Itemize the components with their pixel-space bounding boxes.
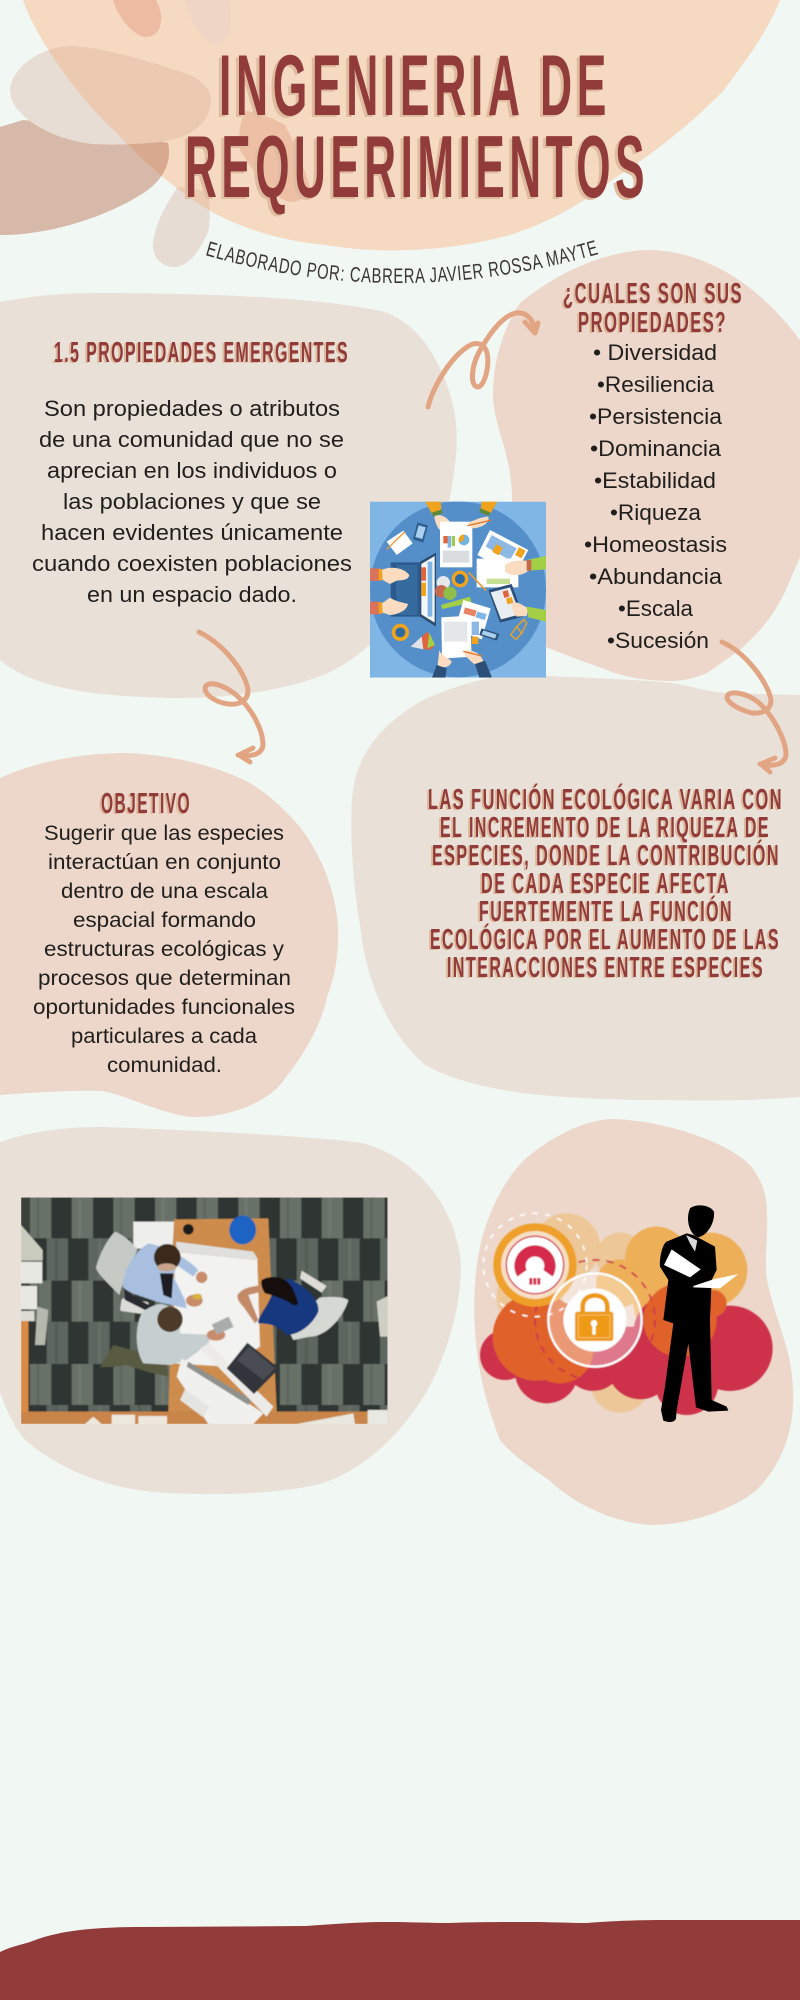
light clouds	[497, 1213, 649, 1413]
text block: objetivo: estructuras ecológicas y	[44, 938, 285, 961]
dark orange clouds	[493, 1283, 727, 1383]
list of properties: • Diversidad	[593, 340, 717, 365]
heading: objetivo: OBJETIVO	[101, 788, 191, 820]
text block: objetivo: dentro de una escala	[61, 880, 268, 903]
text block: definicion	[32, 396, 352, 607]
text block: objetivo	[33, 822, 295, 1077]
text block: objetivo: Sugerir que las especies	[44, 822, 284, 845]
papers on table	[133, 1222, 174, 1250]
panel: funcion ecologica	[351, 676, 800, 1100]
dashed circle red	[535, 1260, 655, 1380]
panel: propiedades list	[493, 250, 800, 681]
bottom docs	[455, 600, 491, 639]
panel: security illustration backdrop	[474, 1119, 793, 1525]
dashed circle white	[483, 1213, 587, 1317]
silhouette: businessman	[660, 1205, 738, 1422]
center pie, coffee and ruler	[437, 576, 450, 589]
list of properties: •Estabilidad	[594, 468, 716, 493]
image: team meeting photo	[21, 1197, 388, 1424]
list of properties	[584, 340, 727, 653]
panel: photo backdrop	[0, 1127, 461, 1494]
bottom arms	[438, 650, 452, 667]
title	[185, 38, 649, 216]
list of properties: •Dominancia	[590, 436, 722, 461]
list of properties: •Riqueza	[610, 500, 702, 525]
cups, palette, glasses	[392, 624, 409, 641]
text block: definicion: en un espacio dado.	[87, 582, 297, 607]
phone and notepad	[413, 522, 428, 543]
heading: cuales son sus propiedades	[563, 278, 743, 339]
left arms	[370, 568, 379, 581]
footer band	[0, 1920, 800, 2000]
text block: definicion: cuando coexisten poblaciones	[32, 551, 352, 576]
text block: definicion: aprecian en los individuos o	[47, 458, 337, 483]
text block: objetivo: procesos que determinan	[38, 967, 291, 990]
gauge	[493, 1223, 577, 1307]
hard hat	[229, 1216, 256, 1244]
table	[168, 1218, 277, 1412]
list of properties: •Escala	[618, 596, 694, 621]
tablet	[488, 584, 523, 623]
top arms	[425, 502, 442, 515]
text block: definicion: hacen evidentes únicamente	[41, 520, 343, 545]
man in blue shirt	[123, 1243, 198, 1308]
image: security clouds illustration	[480, 1205, 773, 1422]
left side furniture	[21, 1225, 43, 1261]
laptop	[391, 562, 420, 617]
text block: funcion ecologica	[428, 782, 783, 984]
list of properties: •Resiliencia	[597, 372, 715, 397]
lock ring	[548, 1273, 642, 1367]
list of properties: •Abundancia	[589, 564, 723, 589]
text block: objetivo: comunidad.	[107, 1054, 222, 1077]
arrow: to properties	[428, 313, 538, 407]
decorative header blobs	[0, 0, 780, 267]
top right documents	[477, 530, 528, 561]
list of properties: •Persistencia	[589, 404, 723, 429]
arrow: to objetivo	[199, 632, 263, 762]
text block: objetivo: particulares a cada	[71, 1025, 257, 1048]
text block: definicion: de una comunidad que no se	[39, 427, 344, 452]
panel: objetivo	[0, 753, 338, 1117]
man in grey shirt	[100, 1345, 168, 1377]
top chart paper	[440, 522, 472, 567]
image: team around table illustration	[370, 501, 546, 678]
list of properties: •Sucesión	[607, 628, 709, 653]
text block: objetivo: espacial formando	[73, 909, 256, 932]
list of properties: •Homeostasis	[584, 532, 727, 557]
heading: propiedades emergentes: 1.5 PROPIEDADES EMERGENTES	[54, 337, 349, 369]
text block: objetivo: oportunidades funcionales	[33, 996, 295, 1019]
woman in blue	[258, 1278, 318, 1335]
subtitle: author: ELABORADO POR: CABRERA JAVIER ROSSA MAYTE	[206, 240, 598, 283]
red clouds	[480, 1293, 773, 1415]
panel: propiedades emergentes	[0, 293, 457, 698]
text block: definicion: las poblaciones y que se	[63, 489, 321, 514]
laptop	[227, 1343, 279, 1394]
arrow: to funcion ecologica	[722, 642, 786, 772]
chairs	[96, 1232, 137, 1295]
rolled plans	[177, 1358, 263, 1424]
text block: objetivo: interactúan en conjunto	[48, 851, 281, 874]
text block: definicion: Son propiedades o atributos	[44, 396, 340, 421]
